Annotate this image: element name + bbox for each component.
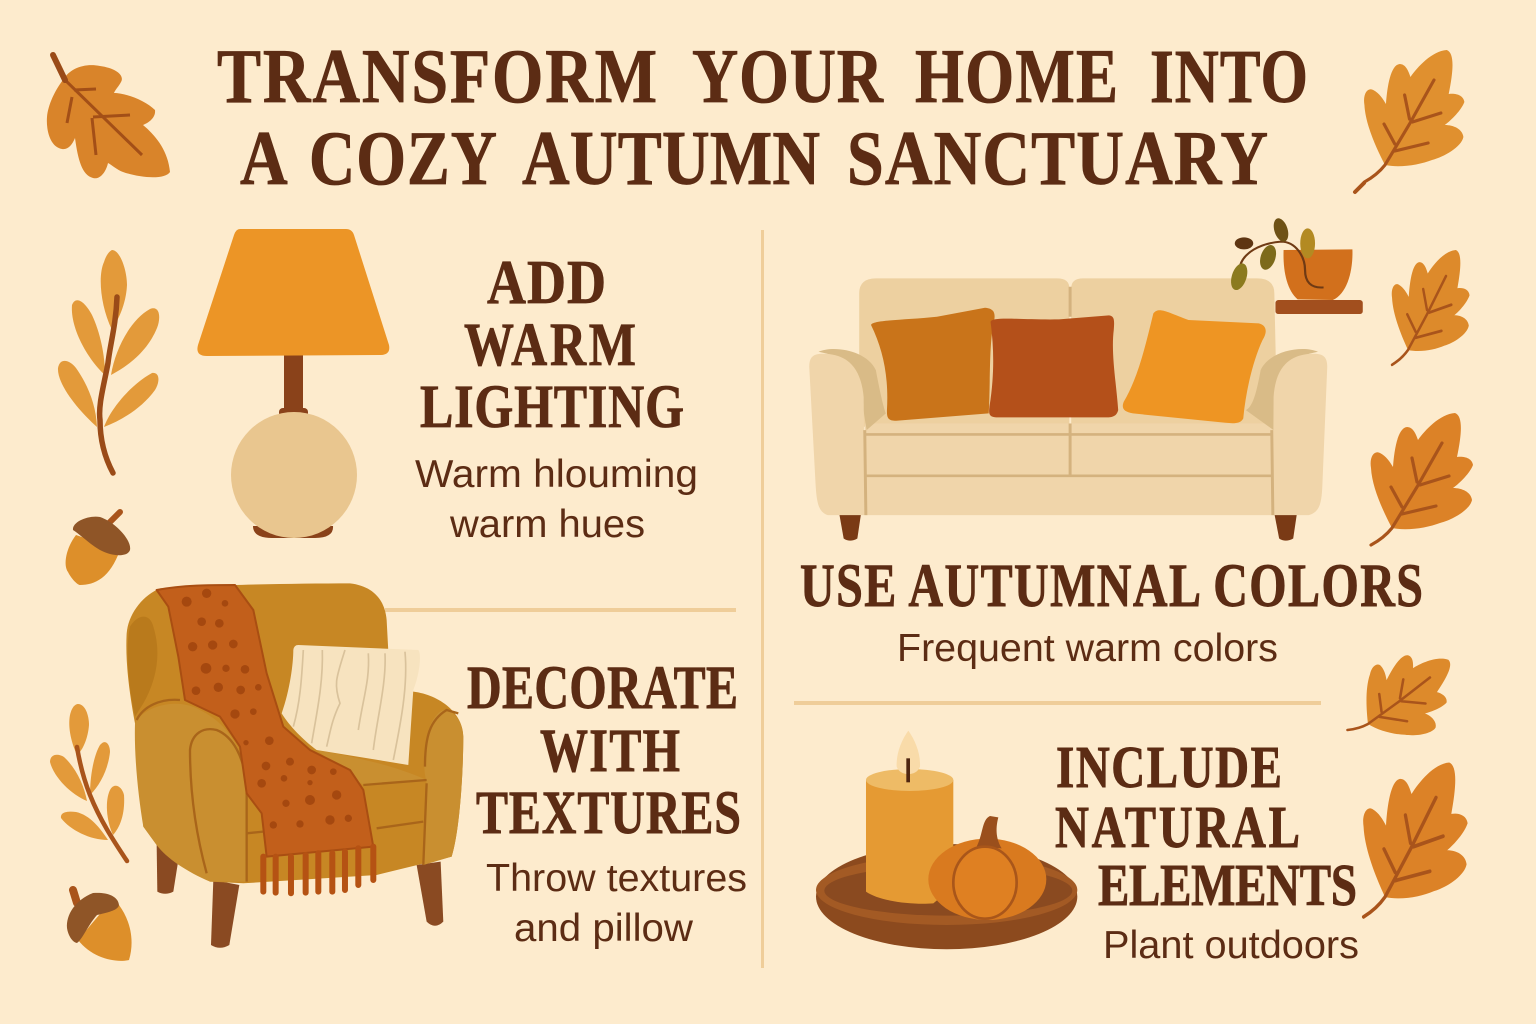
heading: include natural elements	[1055, 734, 1357, 918]
heading: add warm lighting: WARM	[464, 311, 636, 379]
heading: decorate with textures: TEXTURES	[476, 779, 741, 846]
heading: decorate with textures: WITH	[540, 717, 680, 784]
text: lighting description	[415, 453, 698, 546]
title: TRANSFORM	[217, 33, 657, 119]
text: colors description: Frequent warm colors	[897, 627, 1278, 670]
icon: oak leaf top left	[47, 55, 170, 178]
heading: include natural elements: INCLUDE	[1056, 734, 1282, 800]
panel: autumnal colors	[800, 217, 1423, 670]
heading: include natural elements: NATURAL	[1055, 794, 1300, 860]
title: SANCTUARY	[847, 115, 1268, 201]
icon: oak leaf right three	[1347, 634, 1462, 761]
text: lighting description: warm hues	[449, 503, 645, 546]
title	[217, 33, 1308, 201]
text: textures description: Throw textures	[486, 857, 747, 900]
heading: add warm lighting	[420, 248, 684, 441]
icon: candle and pumpkin on tray	[816, 731, 1077, 949]
panel: warm lighting	[197, 229, 698, 546]
icon: branch with leaves lower left	[50, 704, 127, 861]
heading: decorate with textures	[467, 654, 741, 846]
text: natural description: Plant outdoors	[1103, 924, 1359, 967]
icon: oak leaf top right	[1355, 50, 1464, 192]
icon: armchair with throw and pillow	[126, 583, 463, 948]
title: A	[240, 115, 288, 201]
title: HOME	[915, 34, 1118, 119]
title: AUTUMN	[522, 115, 820, 201]
icon: acorn lower left	[67, 890, 132, 961]
icon: oak leaf right one	[1392, 250, 1470, 365]
icon: sofa with pillows, shelf and plant	[809, 217, 1363, 541]
icon: table lamp	[197, 229, 389, 538]
panel: natural elements	[816, 731, 1359, 967]
heading: use autumnal colors: USE AUTUMNAL COLORS	[800, 552, 1423, 619]
title: YOUR	[692, 35, 884, 119]
text: lighting description: Warm hlouming	[415, 453, 698, 496]
heading: decorate with textures: DECORATE	[467, 654, 738, 721]
icon: acorn upper left	[66, 512, 130, 585]
heading: add warm lighting: LIGHTING	[420, 373, 684, 441]
icon: oak leaf right two	[1371, 413, 1473, 545]
icon: oak leaf bottom right	[1363, 762, 1468, 917]
heading: add warm lighting: ADD	[487, 248, 606, 317]
heading: include natural elements: ELEMENTS	[1098, 852, 1357, 918]
title: INTO	[1150, 34, 1308, 119]
text: textures description	[486, 857, 747, 950]
panel: textures	[126, 583, 747, 950]
dividers	[385, 230, 1321, 968]
title: COZY	[309, 117, 497, 201]
icon: branch with leaves upper left	[58, 250, 159, 473]
text: textures description: and pillow	[514, 907, 694, 950]
